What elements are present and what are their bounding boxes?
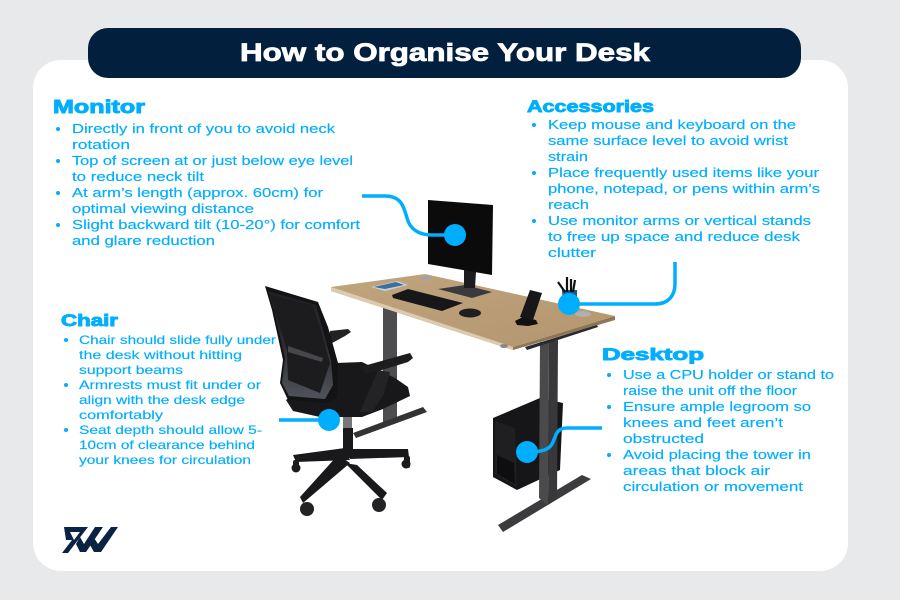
chair bullet list: 10cm of clearance behind — [79, 438, 255, 452]
accessories bullet list: Place frequently used items like your — [548, 166, 819, 180]
accessories bullet list: phone, notepad, or pens within arm’s — [548, 182, 820, 196]
monitor bullet list: Slight backward tilt (10-20°) for comfort — [72, 218, 361, 232]
title banner — [88, 28, 801, 78]
desktop bullet list: areas that block air — [623, 464, 770, 478]
tablet on desk — [371, 281, 408, 291]
heading: desktop: Desktop — [602, 345, 704, 364]
accessories bullet list — [532, 118, 820, 260]
desktop bullet list: obstructed — [623, 432, 704, 446]
heading: accessories: Accessories — [527, 97, 654, 116]
connector: accessories — [558, 262, 675, 315]
panel: desktop tips — [602, 345, 834, 494]
seat — [286, 362, 410, 417]
chair bullet list: the desk without hitting — [79, 348, 242, 362]
connector: desktop — [516, 428, 602, 463]
desktop surface — [331, 274, 615, 350]
panel: chair tips — [61, 311, 276, 467]
base and casters — [292, 416, 410, 516]
desktop bullet list: knees and feet aren’t — [623, 416, 784, 430]
phone on stand — [515, 290, 542, 326]
monitor — [428, 200, 493, 298]
accessories bullet list: Keep mouse and keyboard on the — [548, 118, 796, 132]
panel: monitor tips — [53, 96, 361, 248]
monitor bullet list: to reduce neck tilt — [72, 170, 205, 184]
white content panel — [33, 60, 848, 571]
chair bullet list: align with the desk edge — [79, 393, 246, 407]
monitor bullet list: At arm’s length (approx. 60cm) for — [72, 186, 323, 200]
accessories bullet list: same surface level to avoid wrist — [548, 134, 789, 148]
accessories bullet list: Use monitor arms or vertical stands — [548, 214, 811, 228]
monitor bullet list: rotation — [72, 138, 130, 152]
mesh — [270, 295, 330, 393]
desktop bullet list: raise the unit off the floor — [623, 384, 797, 398]
monitor bullet list: optimal viewing distance — [72, 202, 254, 216]
lumbar support — [288, 346, 323, 362]
PC tower — [493, 398, 563, 490]
keyboard — [392, 289, 463, 311]
office chair — [265, 286, 413, 516]
mouse — [459, 308, 481, 318]
pen holder — [558, 277, 577, 308]
back desk leg and foot — [353, 305, 427, 438]
monitor bullet list: Directly in front of you to avoid neck — [72, 122, 336, 136]
chair bullet list — [64, 333, 276, 467]
near armrest — [360, 353, 413, 412]
chair bullet list: support beams — [79, 363, 183, 377]
accessories bullet list: reach — [548, 198, 589, 212]
monitor bullet list: Top of screen at or just below eye level — [72, 154, 353, 168]
heading: monitor: Monitor — [53, 96, 145, 117]
heading: chair: Chair — [61, 311, 118, 330]
panel: accessories tips — [527, 97, 820, 260]
desktop bullet list: circulation or movement — [623, 480, 804, 494]
connector: chair — [279, 409, 340, 431]
desktop bullet list: Ensure ample legroom so — [623, 400, 811, 414]
back frame — [268, 291, 333, 399]
chair bullet list: comfortably — [79, 408, 163, 422]
icon: logo — [62, 527, 118, 553]
far armrest — [328, 329, 351, 345]
illustration: standing desk — [265, 200, 615, 532]
desktop bullet list: Avoid placing the tower in — [623, 448, 811, 462]
desktop bullet list: Use a CPU holder or stand to — [623, 368, 834, 382]
desktop bullet list — [607, 368, 834, 494]
accessories bullet list: strain — [548, 150, 588, 164]
front desk leg and foot — [498, 340, 591, 532]
monitor bullet list: and glare reduction — [72, 234, 215, 248]
accessories bullet list: to free up space and reduce desk — [548, 230, 801, 244]
chair bullet list: Seat depth should allow 5- — [79, 423, 262, 437]
chair bullet list: Chair should slide fully under — [79, 333, 276, 347]
chair back — [265, 286, 338, 403]
title: How to Organise Your Desk — [240, 39, 650, 67]
accessories bullet list: clutter — [548, 246, 596, 260]
monitor bullet list — [56, 122, 361, 248]
chair bullet list: your knees for circulation — [79, 453, 251, 467]
connector: monitor — [362, 196, 466, 246]
chair bullet list: Armrests must fit under or — [79, 378, 261, 392]
